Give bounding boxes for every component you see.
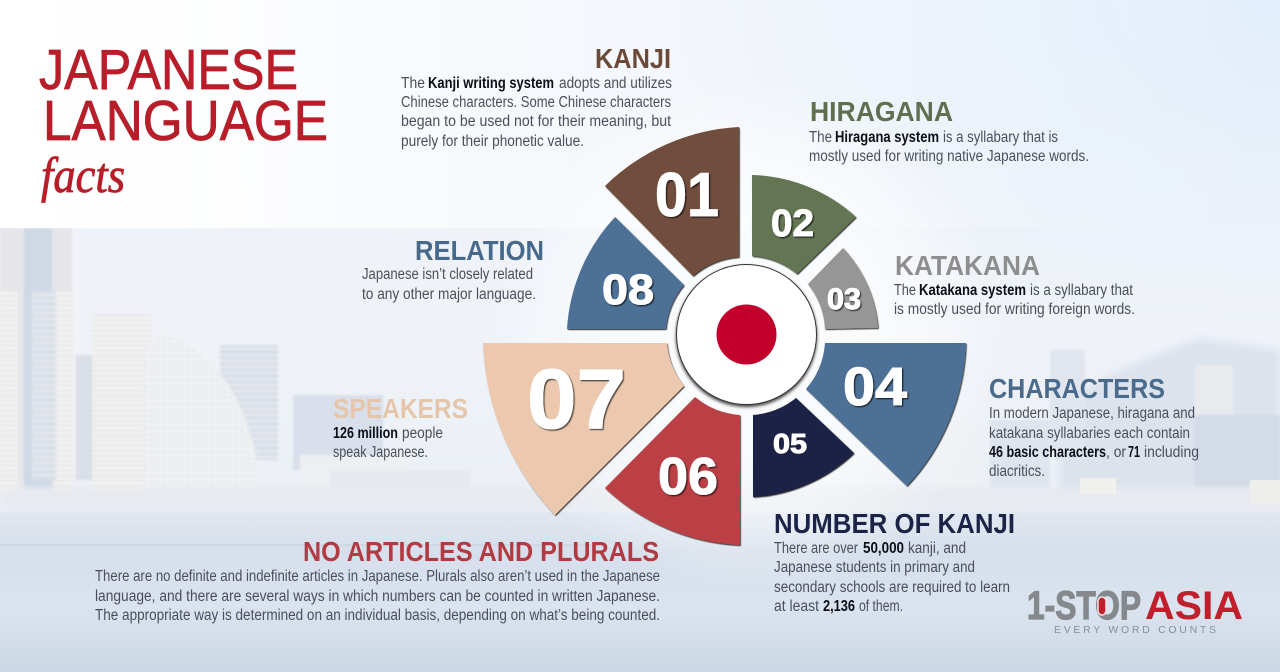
wheel diagram (483, 127, 966, 545)
text: number of kanji description: Japanese students in primary and (774, 559, 975, 576)
title: facts (41, 147, 125, 203)
text: hiragana description: mostly used for writing native Japanese words. (809, 148, 1089, 165)
segment 02: 02 (771, 203, 814, 245)
text: characters description: , or (1106, 444, 1126, 461)
panel: relation (362, 235, 544, 303)
heading: number of kanji: NUMBER OF KANJI (774, 508, 1015, 539)
text: number of kanji description: 50,000 (863, 540, 904, 557)
text: speakers description: people (402, 425, 443, 442)
panel: kanji (401, 43, 672, 150)
segment 07 (483, 343, 684, 515)
text: number of kanji description (774, 540, 1010, 615)
text: kanji description: Kanji writing system (428, 75, 554, 92)
heading: speakers: SPEAKERS (333, 393, 468, 424)
text: characters description (989, 405, 1199, 480)
segment 06: 06 (658, 448, 718, 506)
heading: kanji: KANJI (595, 43, 671, 74)
segment 04 (806, 343, 966, 486)
text: katakana description: Katakana system (919, 282, 1026, 299)
panel: hiragana (809, 96, 1089, 165)
text: hiragana description: Hiragana system (835, 129, 939, 146)
logo: 1-Stop Asia (1027, 584, 1243, 636)
segment 04: 04 (843, 357, 907, 417)
title (39, 38, 328, 203)
segment 07: 07 (527, 352, 626, 446)
text: characters description: including (1144, 444, 1199, 461)
text: characters description: katakana syllabaries each contain (989, 425, 1190, 442)
text: number of kanji description: of them. (859, 598, 903, 615)
segment 03 (808, 248, 878, 329)
text: no articles description: The appropriate way is determined on an individual basis, depending on what’s being counted. (95, 607, 660, 624)
text: number of kanji description: 2,136 (823, 598, 855, 615)
text: katakana description: is a syllabary that (1030, 282, 1134, 299)
text: relation description: to any other major language. (362, 286, 536, 303)
text: hiragana description: The (809, 129, 832, 146)
text: hiragana description: is a syllabary that is (943, 129, 1058, 146)
text: relation description: Japanese isn’t closely related (362, 266, 533, 283)
text: katakana description (894, 282, 1135, 318)
text: kanji description: The (401, 75, 425, 92)
text: no articles description (95, 568, 660, 624)
logo: 1-Stop Asia: ASIA (1145, 584, 1243, 628)
segment 05 (753, 398, 854, 497)
segment 06 (605, 397, 740, 545)
text: characters description: 71 (1128, 444, 1140, 461)
text: no articles description: language, and there are several ways in which numbers can be counted in written Japanese. (95, 588, 660, 605)
text: characters description: In modern Japanese, hiragana and (989, 405, 1195, 422)
panel: characters (989, 373, 1199, 480)
text: number of kanji description: at least (774, 598, 820, 615)
heading: katakana: KATAKANA (895, 250, 1040, 281)
text: number of kanji description: kanji, and (908, 540, 966, 557)
text: hiragana description (809, 129, 1089, 165)
center Japanese flag circle (676, 264, 816, 404)
logo: 1-Stop Asia: 1-STOP (1027, 584, 1141, 628)
segment 01 (605, 127, 739, 276)
segment 03: 03 (827, 283, 861, 316)
segment 08: 08 (602, 266, 654, 314)
segment 08 (567, 217, 684, 329)
title: JAPANESE (39, 38, 298, 102)
text: speakers description (333, 425, 443, 461)
heading: no articles and plurals: NO ARTICLES AND PLURALS (303, 536, 659, 567)
logo: 1-Stop Asia: EVERY WORD COUNTS (1054, 624, 1216, 636)
text: relation description (362, 266, 536, 303)
text: kanji description: Chinese characters. Some Chinese characters (401, 94, 671, 111)
text: characters description: diacritics. (989, 463, 1045, 480)
segment 02 (752, 175, 856, 274)
text: kanji description: adopts and utilizes (559, 75, 672, 92)
panel: number of kanji (774, 508, 1015, 615)
heading: characters: CHARACTERS (989, 373, 1165, 404)
heading: hiragana: HIRAGANA (810, 96, 953, 127)
text: kanji description: began to be used not for their meaning, but (401, 113, 672, 130)
heading: relation: RELATION (415, 235, 544, 266)
text: speakers description: speak Japanese. (333, 444, 428, 461)
text: katakana description: is mostly used for writing foreign words. (894, 301, 1135, 318)
text: katakana description: The (894, 282, 916, 299)
title: LANGUAGE (43, 89, 328, 153)
segment 05: 05 (773, 428, 807, 459)
text: kanji description (401, 75, 672, 150)
text: kanji description: purely for their phonetic value. (401, 133, 584, 150)
text: no articles description: There are no definite and indefinite articles in Japanese. Plurals also aren’t used in the Japanese (95, 568, 660, 585)
text: number of kanji description: There are over (774, 540, 858, 557)
panel: no articles and plurals (95, 536, 660, 624)
panel: speakers (333, 393, 468, 461)
segment 01: 01 (655, 161, 719, 230)
panel: katakana (894, 250, 1135, 318)
text: characters description: 46 basic characters (989, 444, 1106, 461)
text: speakers description: 126 million (333, 425, 398, 442)
text: number of kanji description: secondary schools are required to learn (774, 579, 1010, 596)
